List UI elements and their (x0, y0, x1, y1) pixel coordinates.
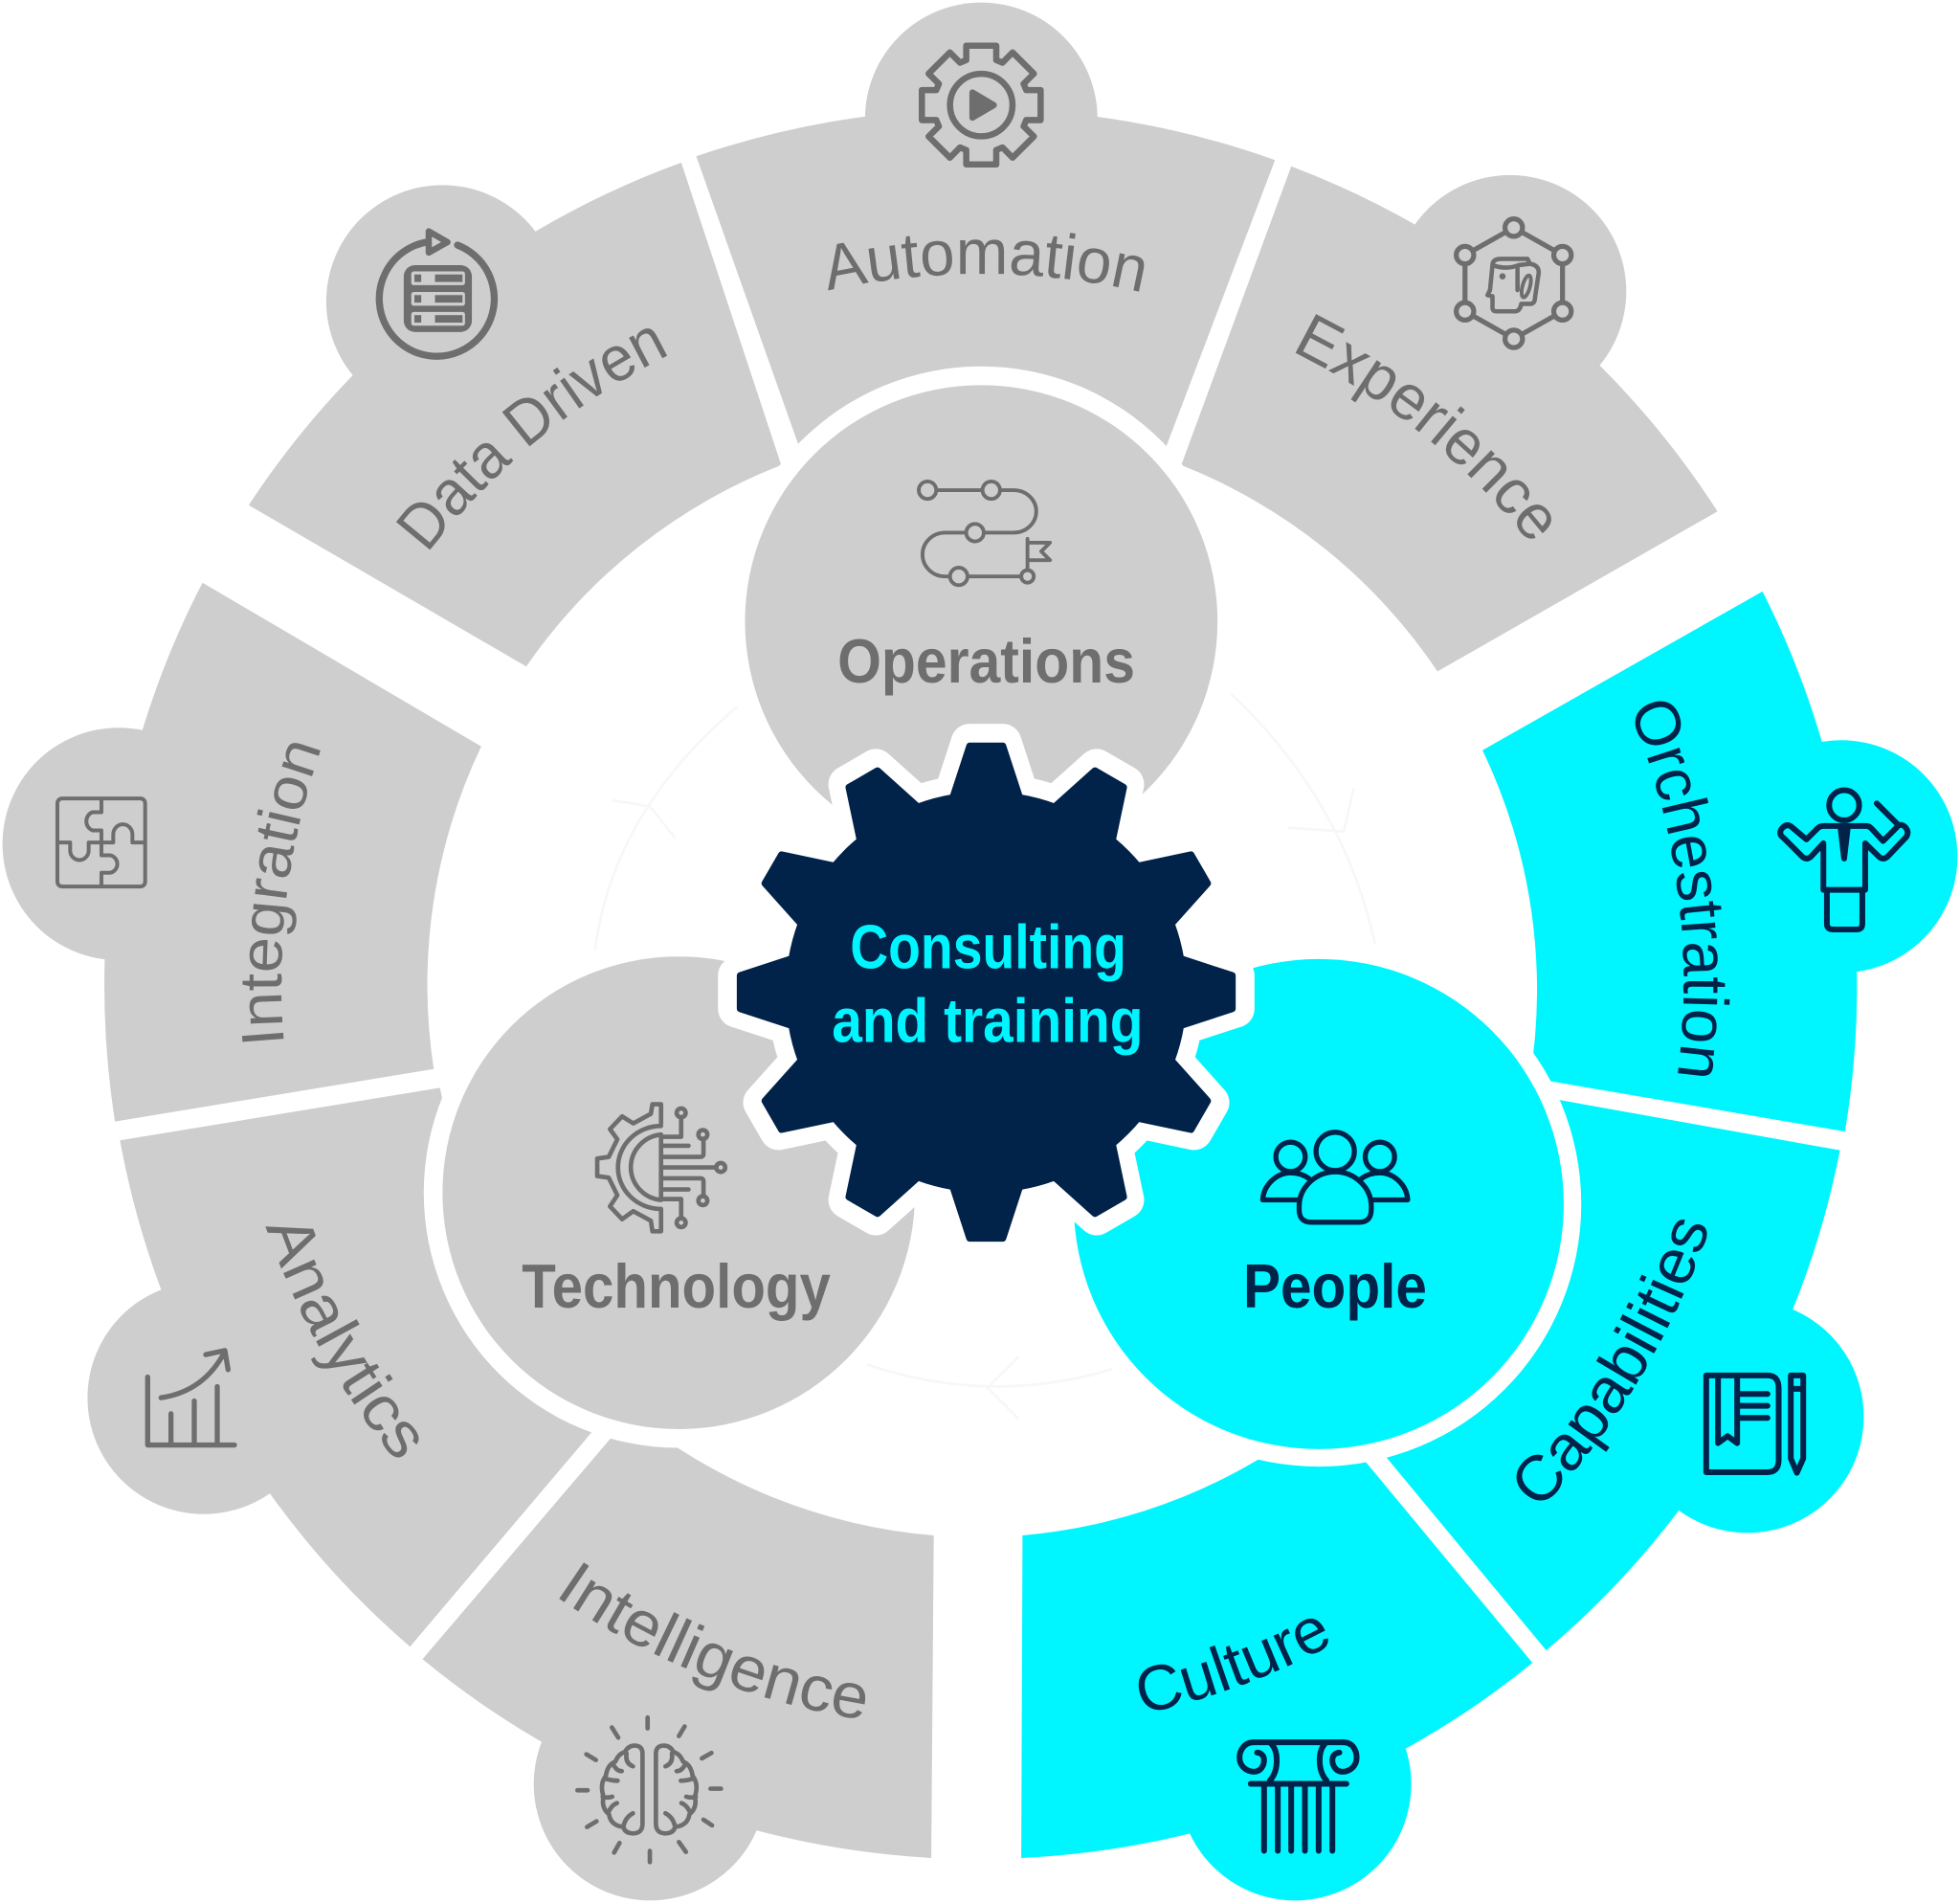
segment shape: Integration (104, 583, 481, 1122)
hub disc: People (1074, 959, 1564, 1449)
icon: ionic column (1239, 1742, 1357, 1851)
panel: central gear (737, 743, 1236, 1242)
arrow: faint cycle Operations to People (1232, 694, 1375, 944)
label: Orchestration: Orchestration (1635, 701, 1730, 1076)
icon: conductor (1780, 791, 1907, 929)
lobe: Integration (3, 728, 235, 960)
panel: Data Driven segment (249, 163, 781, 666)
hub halo: Technology (424, 938, 934, 1448)
icon: rising bar chart (147, 1351, 234, 1445)
label: Technology: Technology (522, 1251, 831, 1321)
arrow: faint cycle People to Technology (862, 1356, 1112, 1419)
label: Integration: Integration (241, 743, 321, 1041)
panel: People hub (1057, 942, 1581, 1466)
icon: puzzle (57, 798, 145, 886)
label: Capabilities: Capabilities (1516, 1220, 1707, 1501)
segment shape: Intelligence (422, 1414, 934, 1858)
segment shape: Capabilities (1341, 1094, 1840, 1650)
label: People: People (1243, 1251, 1427, 1321)
panel: Experience segment (1181, 167, 1717, 672)
icon: route with flag (919, 481, 1050, 585)
label: Operations: Operations (837, 626, 1135, 696)
icon: three people (1262, 1132, 1408, 1222)
panel: Culture segment (1021, 1459, 1533, 1901)
icon: database with refresh arrow (379, 232, 494, 356)
panel: Analytics segment (88, 1087, 591, 1646)
segment shape: Culture (1021, 1413, 1532, 1858)
panel: Orchestration segment (1482, 592, 1958, 1131)
segment shape: Automation (697, 109, 1275, 457)
label: Data Driven: Data Driven (396, 328, 667, 549)
icon: notebook and pencil (1706, 1376, 1803, 1473)
hub disc: Technology (442, 956, 915, 1429)
icon: half gear circuit (597, 1105, 725, 1231)
label: Analytics: Analytics (265, 1226, 419, 1457)
segment shape: Data Driven (249, 163, 781, 666)
lobe: Intelligence (534, 1668, 767, 1900)
icon: head in network hexagon (1457, 219, 1571, 347)
panel: Operations hub (726, 367, 1236, 877)
arrow: faint cycle Technology to Operations (595, 706, 738, 951)
segment shape: Analytics (120, 1087, 619, 1646)
hub halo: People (1057, 942, 1581, 1466)
hub disc: Operations (745, 385, 1217, 858)
lobe: Culture (1179, 1668, 1412, 1900)
label: Intelligence: Intelligence (559, 1562, 865, 1718)
gear halo (737, 743, 1236, 1242)
label: Culture: Culture (1139, 1618, 1328, 1710)
lobe: Automation (865, 3, 1098, 235)
icon: gear with play button (922, 46, 1040, 165)
lobe: Analytics (87, 1282, 320, 1514)
gear body (741, 747, 1232, 1238)
label: Automation: Automation (828, 233, 1145, 292)
icon: brain with rays (577, 1717, 721, 1862)
lobe: Experience (1393, 175, 1626, 408)
lobe: Orchestration (1725, 740, 1957, 973)
panel: Technology hub (424, 938, 934, 1448)
panel: Integration segment (2, 582, 481, 1122)
panel: Capabilities segment (1386, 1100, 1864, 1650)
label: Experience: Experience (1296, 314, 1551, 539)
title: Consulting and training: and training (832, 986, 1143, 1056)
lobe: Capabilities (1631, 1300, 1863, 1533)
lobe: Data Driven (326, 185, 559, 417)
title: Consulting and training: Consulting (850, 912, 1126, 982)
panel: Intelligence segment (423, 1438, 934, 1901)
segment shape: Experience (1181, 167, 1718, 671)
segment shape: Orchestration (1482, 592, 1857, 1131)
hub halo: Operations (726, 367, 1236, 877)
panel: Automation segment (697, 2, 1275, 446)
